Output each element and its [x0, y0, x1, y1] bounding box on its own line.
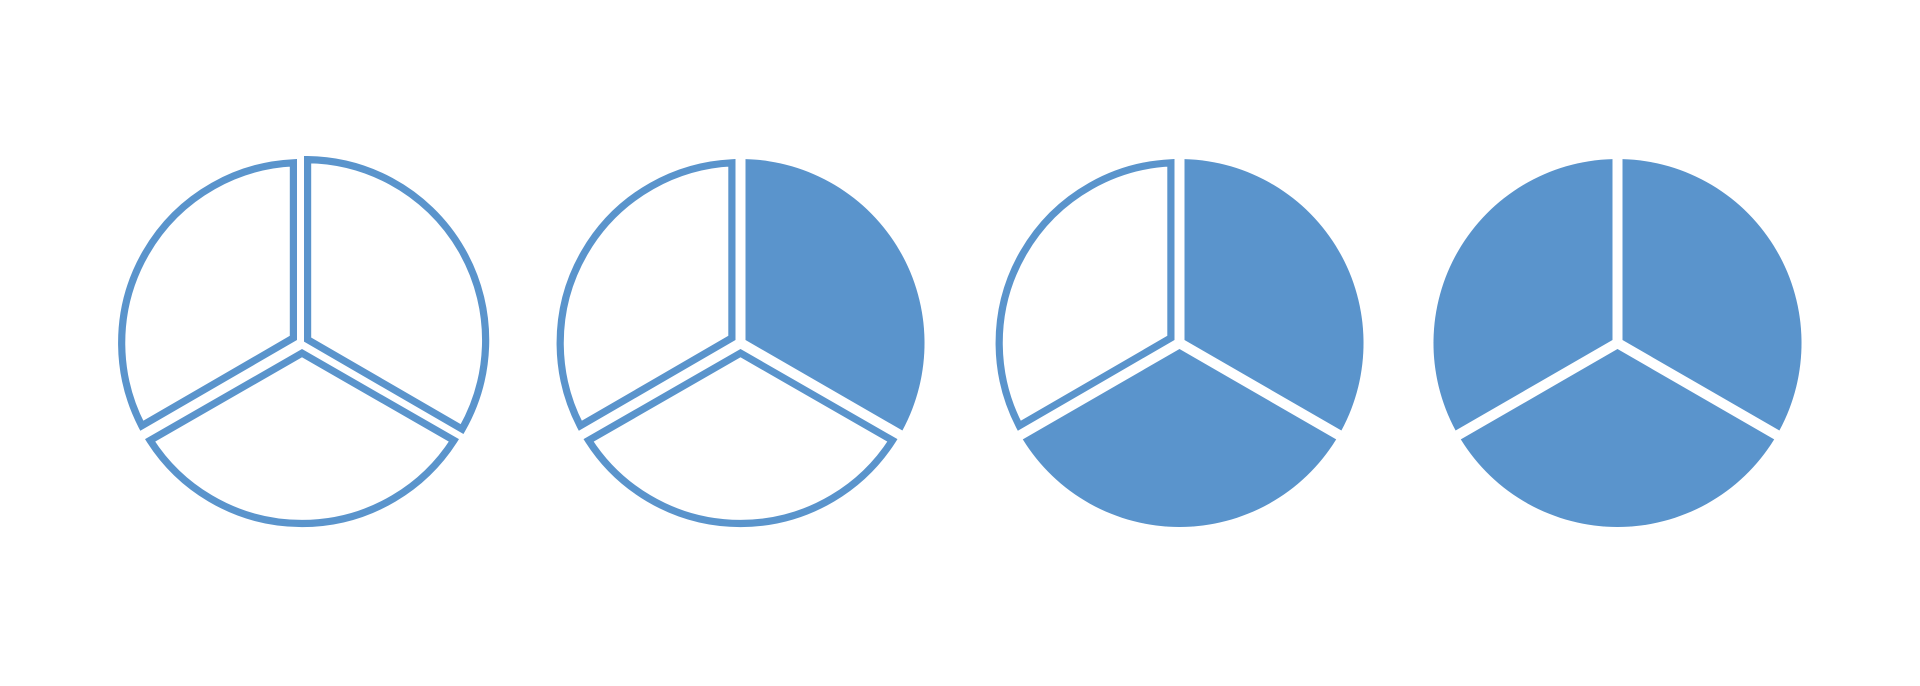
- segment filled: bottom: [1023, 349, 1336, 527]
- segment filled: top right: [1184, 159, 1364, 430]
- segment outline: bottom: [150, 353, 454, 523]
- segment filled: top right: [746, 159, 925, 430]
- segment outline: top left: [999, 163, 1171, 426]
- segment outline: top left: [122, 163, 293, 426]
- segment filled: top right: [1622, 159, 1802, 430]
- pie chart 3: two segments filled: [999, 159, 1364, 527]
- segment filled: top left: [1433, 159, 1612, 430]
- segment outline: bottom: [589, 353, 892, 523]
- segment filled: bottom: [1461, 349, 1774, 527]
- pie chart 1: no segments filled: [122, 160, 486, 523]
- segment outline: top right: [308, 160, 486, 429]
- pie chart 2: one segment filled: [560, 159, 925, 523]
- segment outline: top left: [560, 163, 732, 426]
- pie chart 4: all segments filled: [1433, 159, 1802, 527]
